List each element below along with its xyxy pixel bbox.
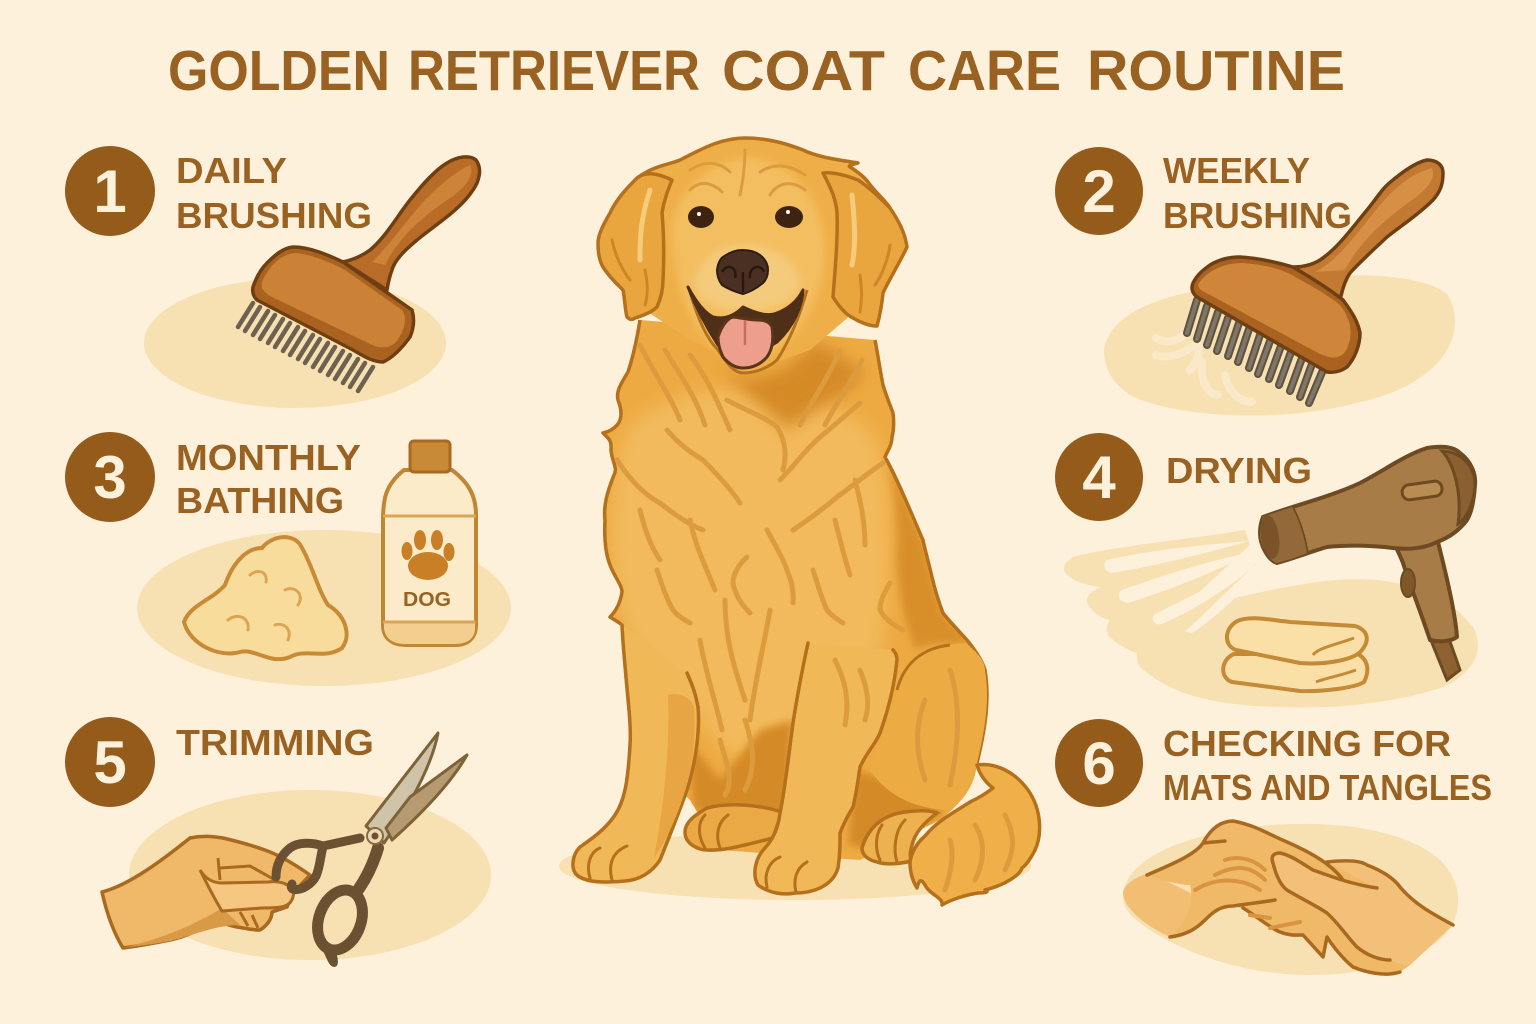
thumb and right hand: [1272, 853, 1453, 965]
title: GOLDEN: [168, 39, 390, 103]
badge 1: 1: [93, 158, 127, 225]
muzzle: [695, 245, 800, 311]
badge 2: 2: [1082, 158, 1116, 225]
panel: step 4 drying: [1055, 433, 1478, 707]
head top outline: [637, 138, 890, 208]
icon: wide brush: [1187, 160, 1443, 403]
bottle label text: DOG: [403, 589, 451, 611]
nostrils: [722, 267, 764, 292]
dog body outline: [603, 320, 987, 763]
dog front right leg: [755, 643, 897, 894]
title: [168, 39, 1345, 103]
dog body fill: [603, 320, 987, 860]
left leg shading: [654, 694, 695, 858]
label: checking for mats and tangles: MATS AND TANGLES: [1163, 767, 1492, 808]
label: weekly brushing: WEEKLY: [1163, 150, 1310, 191]
dog inner paw: [685, 805, 782, 850]
label: trimming: TRIMMING: [176, 722, 374, 763]
icon: dog shampoo bottle: [383, 441, 476, 645]
thigh edge: [897, 645, 950, 690]
icon: air streaks: [1104, 541, 1258, 633]
ground shadow: [559, 832, 1031, 900]
label: drying: DRYING: [1166, 450, 1312, 491]
dog haunch shadow: [848, 770, 945, 850]
panel: step 3 monthly bathing: [65, 432, 511, 686]
tongue: [718, 317, 773, 368]
badge 6: 6: [1082, 730, 1116, 797]
badge 2: [1055, 147, 1143, 235]
title: CARE: [908, 39, 1061, 103]
nose: [717, 250, 768, 294]
scissor blades: [366, 733, 438, 843]
icon: hand holding scissors: [102, 733, 467, 966]
head shape: [630, 138, 890, 375]
dog head: [598, 138, 907, 375]
badge 4: 4: [1082, 444, 1116, 511]
toe lines: [588, 815, 905, 892]
chin: [690, 290, 807, 373]
label: monthly bathing: BATHING: [176, 480, 344, 521]
label: daily brushing: [176, 150, 372, 236]
panel: step 1 daily brushing: [65, 146, 480, 408]
icon: folded towels: [1223, 618, 1367, 691]
left ear: [598, 174, 672, 319]
mouth: [688, 287, 803, 345]
label: monthly bathing: MONTHLY: [176, 437, 361, 478]
dog soft shading: [611, 340, 975, 850]
label: checking for mats and tangles: [1163, 723, 1492, 808]
badge 3: [65, 432, 155, 522]
badge 6: [1055, 719, 1143, 807]
badge 3: 3: [93, 444, 127, 511]
title: RETRIEVER: [408, 39, 700, 103]
right ear: [823, 173, 907, 326]
illustration: golden retriever: [559, 138, 1040, 905]
title: ROUTINE: [1087, 39, 1345, 103]
scissor handles: [291, 838, 360, 890]
panel: step 2 weekly brushing: [1055, 147, 1455, 416]
backdrop with air stream: [1064, 530, 1478, 707]
dog belly shadow: [690, 716, 792, 812]
dog chest fur: [611, 389, 889, 763]
backdrop blob: [1104, 275, 1455, 416]
tongue crease: [744, 320, 746, 345]
icon: paw print: [402, 530, 454, 580]
backdrop ellipse: [144, 278, 446, 408]
icon: hands checking fur: [1123, 821, 1453, 975]
backdrop ellipse: [129, 790, 491, 960]
icon: loose fur wisps: [1156, 330, 1252, 402]
dog front left leg: [573, 625, 699, 882]
dog thigh: [870, 643, 987, 810]
dog hind paw: [862, 811, 937, 864]
badge 1: [65, 146, 155, 236]
panel: step 5 trimming: [65, 717, 491, 966]
badge 5: [65, 717, 155, 807]
left eye: [688, 206, 714, 228]
ear fur: [612, 240, 890, 312]
fur strokes: [617, 345, 1012, 890]
label: checking for mats and tangles: CHECKING FOR: [1163, 723, 1451, 764]
icon: foam pile: [184, 537, 347, 659]
icon: slicker brush: [238, 157, 480, 391]
brow fur: [690, 150, 805, 195]
label: weekly brushing: BRUSHING: [1163, 195, 1352, 236]
neck shadow under chin: [715, 340, 865, 430]
face highlight: [672, 158, 825, 365]
ear highlights: [640, 190, 855, 265]
panel: step 6 checking for mats and tangles: [1055, 719, 1492, 975]
backdrop ellipse: [137, 530, 511, 686]
label: daily brushing: BRUSHING: [176, 195, 372, 236]
backdrop blob: [1123, 824, 1458, 975]
title: COAT: [722, 39, 885, 103]
label: daily brushing: DAILY: [176, 150, 287, 191]
label: weekly brushing: [1163, 150, 1352, 236]
dog tail: [910, 764, 1040, 905]
right eye: [775, 206, 803, 228]
icon: hair dryer: [1258, 447, 1475, 680]
badge 5: 5: [93, 729, 127, 796]
label: monthly bathing: [176, 437, 361, 521]
badge 4: [1055, 433, 1143, 521]
dog flank shadow: [890, 473, 967, 650]
